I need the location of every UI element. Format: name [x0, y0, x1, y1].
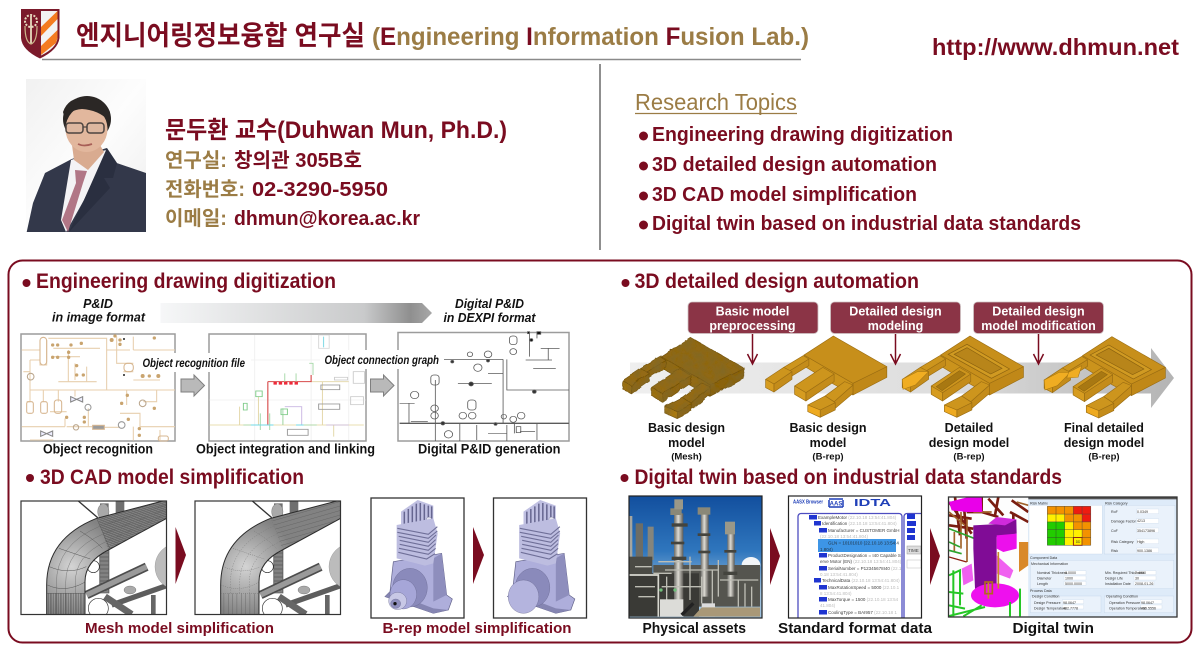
label: object recognition file	[137, 353, 251, 372]
image: physical plant assets	[629, 496, 762, 618]
step box: basic model preprocessing: Basic model	[716, 304, 789, 318]
caption: mesh model simplification: Mesh model simplification	[85, 620, 274, 637]
professor contact details: 전화번호:	[165, 178, 245, 201]
arrow: assets to data	[770, 528, 780, 585]
image: digital twin dashboard	[948, 497, 1177, 617]
professor contact details: dhmun@korea.ac.kr	[234, 208, 420, 230]
caption: detailed design model (B-rep)	[929, 421, 1009, 462]
image: AAS browser standard format data: 8 13:54:41.804)	[820, 591, 852, 596]
output label: digital P&ID in DEXPI format: Digital P&ID	[455, 297, 524, 311]
dashboard field labels: CoF	[1111, 529, 1119, 533]
caption: detailed design model (B-rep): (B-rep)	[953, 452, 985, 462]
image: AAS browser standard format data: MaxTorque = 1500 (22.10.18 13:54	[828, 597, 899, 602]
arrow: gradient flow	[160, 303, 432, 323]
drawing: raster P&ID object recognition	[21, 334, 175, 441]
dashboard field labels: 900.1386	[1137, 549, 1152, 553]
heading: 3D detailed design automation: 3D detailed design automation	[634, 270, 919, 293]
image: dense mesh pipes	[46, 502, 166, 614]
step box: detailed design model modification: model modification	[981, 319, 1096, 333]
header logo: university shield	[21, 9, 60, 58]
image frame: dense mesh	[21, 501, 166, 614]
heading: 3D CAD model simplification: 3D CAD model simplification	[40, 466, 304, 489]
step box: basic model preprocessing	[688, 302, 818, 334]
image: AAS browser standard format data: IDTA	[854, 497, 892, 509]
arrow: step 1 down	[748, 334, 758, 364]
caption: basic design model (B-rep): (B-rep)	[812, 452, 844, 462]
step box: basic model preprocessing: preprocessing	[709, 319, 796, 333]
dashboard field labels: 7.4800	[1135, 571, 1146, 575]
dashboard field labels	[1030, 502, 1156, 610]
risk matrix: DD	[1076, 540, 1081, 544]
caption: detailed design model (B-rep): design model	[929, 436, 1009, 450]
caption: digital P&ID generation: Digital P&ID generation	[418, 442, 560, 456]
image: AAS browser standard format data: SerialNumber = P12345678I40 (22.1	[828, 566, 902, 571]
dashboard field labels: Design Temperature	[1034, 606, 1066, 610]
3D model: detailed B-rep	[902, 336, 1023, 417]
dashboard field labels: 0.0349	[1137, 510, 1148, 514]
caption: final detailed design model (B-rep): (B-rep)	[1088, 452, 1120, 462]
caption: basic design model (B-rep): model	[810, 436, 846, 450]
caption: basic design model (mesh): Basic design	[648, 421, 725, 435]
title: (Engineering Information Fusion Lab.)	[372, 23, 809, 51]
drawing: digital P&ID	[398, 332, 569, 441]
dashboard field labels: Design Condition	[1032, 594, 1059, 598]
dashboard field labels: 2008-01-26	[1135, 582, 1153, 586]
dashboard field labels: Risk Category	[1105, 502, 1128, 506]
step box: detailed design model modification	[974, 302, 1104, 334]
dashboard field labels: Risk	[1111, 549, 1118, 553]
arrow: data to twin	[930, 528, 940, 585]
caption: basic design model (B-rep)	[789, 421, 867, 462]
dashboard field labels: Operating Condition	[1106, 594, 1138, 598]
dashboard field labels: Diameter	[1037, 576, 1052, 580]
research topics list: Digital twin based on industrial data standards	[652, 212, 1081, 235]
professor contact details: 02-3290-5950	[252, 179, 388, 201]
image: AAS browser standard format data: 41.804)	[820, 603, 836, 608]
step box: detailed design modeling	[830, 302, 960, 334]
dashboard field labels: Damage Factor	[1111, 520, 1137, 524]
image: AAS browser standard format data: ExampleMotor (22.10.18 13:54:41.804)	[818, 515, 897, 520]
dashboard field labels: Mechanical Information	[1031, 562, 1068, 566]
3D model: mesh	[623, 337, 744, 419]
dashboard field labels: Min. Required Thickness	[1105, 571, 1145, 575]
caption: final detailed design model (B-rep): design model	[1064, 436, 1144, 450]
input label: P&ID in image format: P&ID	[83, 297, 113, 311]
caption: B-rep model simplification: B-rep model simplification	[382, 620, 572, 637]
image: AAS browser standard format data: CoolingType = BAI957 (22.10.18 1	[828, 610, 897, 615]
drawing: integrated P&ID	[209, 334, 366, 441]
professor contact details: 창의관 305B호	[234, 149, 362, 172]
image: AAS browser standard format data: TIME	[908, 548, 919, 553]
dashboard field labels: Design Life	[1105, 576, 1123, 580]
output label: digital P&ID in DEXPI format: in DEXPI format	[444, 311, 536, 325]
arrow: background process band	[630, 348, 1174, 408]
professor contact details: 문두환 교수(Duhwan Mun, Ph.D.)	[165, 117, 507, 144]
dashboard field labels: Risk Matrix	[1030, 502, 1048, 506]
caption: final detailed design model (B-rep): Final detailed	[1064, 421, 1144, 435]
label: object recognition file: Object recognition file	[142, 358, 246, 370]
caption: basic design model (B-rep): Basic design	[789, 421, 867, 435]
dashboard field labels: Component Data	[1030, 556, 1057, 560]
research topics list: Research Topics	[635, 89, 797, 115]
image: simplified mesh pipes	[220, 502, 340, 614]
image: AAS browser standard format data: AAS	[830, 502, 842, 508]
dashboard field labels: Length	[1037, 582, 1048, 586]
3D model: basic B-rep	[766, 336, 887, 417]
panel: digital twin based on industrial data standards	[620, 466, 1177, 637]
step box: detailed design model modification: Detailed design	[992, 304, 1085, 318]
caption: basic design model (mesh): model	[668, 436, 705, 450]
arrow: grey process arrow 1	[181, 375, 204, 396]
caption: object recognition: Object recognition	[43, 442, 153, 456]
research topics list: 3D CAD model simplification	[652, 183, 917, 206]
website url: http://www.dhmun.net	[932, 34, 1179, 60]
dashboard field labels: 4213	[1137, 519, 1145, 523]
step box: detailed design modeling: modeling	[868, 319, 923, 333]
heading: digital twin based on industrial data standards: Digital twin based on industrial data standards	[634, 466, 1062, 489]
image: AAS browser standard format data: MaxRotationSpeed = 5000 (22.10.1	[828, 585, 900, 590]
caption: digital twin: Digital twin	[1012, 620, 1094, 637]
caption: basic design model (mesh)	[648, 421, 725, 462]
dashboard field labels: 354173896	[1137, 529, 1155, 533]
image: AAS browser standard format data: TechnicalData (22.10.18 13:54:41.804)	[822, 578, 900, 583]
research topics list	[635, 89, 1081, 235]
output label: digital P&ID in DEXPI format	[444, 297, 536, 325]
dashboard field labels: 1000	[1065, 576, 1073, 580]
image: simplified engine B-rep	[494, 498, 586, 618]
dashboard field labels: 98.0647	[1141, 601, 1154, 605]
heading: engineering drawing digitization: Engineering drawing digitization	[36, 270, 336, 293]
image frame: simplified mesh	[195, 501, 340, 614]
input label: P&ID in image format: in image format	[52, 310, 146, 324]
image: AAS browser standard format data: Identification (22.10.18 13:54:41.804)	[822, 521, 897, 526]
dashboard field labels: RoF	[1111, 510, 1119, 514]
dashboard field labels: 8.0000	[1065, 571, 1076, 575]
professor contact details	[165, 117, 507, 230]
caption: standard format data: Standard format data	[778, 620, 933, 637]
arrow: simplification 2	[473, 527, 484, 584]
dashboard field labels: 30	[1135, 576, 1139, 580]
dashboard field labels: Operation Pressure	[1109, 601, 1140, 605]
research topics list: Engineering drawing digitization	[652, 123, 953, 146]
input label: P&ID in image format	[52, 297, 146, 324]
image: AAS browser standard format data: GLN = 10101010 (22.10.18 13:54:4	[828, 540, 899, 546]
image: AAS browser standard format data: 1.804)	[820, 547, 833, 552]
caption: object integration and linking: Object integration and linking	[196, 442, 375, 456]
arrow: step 2 down	[890, 334, 900, 364]
dashboard field labels: Risk Category	[1111, 540, 1134, 544]
professor portrait photo	[26, 79, 146, 232]
panel: 3D detailed design automation	[622, 270, 1174, 462]
title	[76, 21, 809, 51]
dashboard field labels: 482.7778	[1063, 606, 1078, 610]
title: 엔지니어링정보융합 연구실	[76, 21, 365, 51]
dashboard field labels: 5000.0000	[1065, 582, 1082, 586]
dashboard field labels: 98.0647	[1063, 601, 1076, 605]
dashboard field labels: Operation Temperature	[1109, 606, 1146, 610]
image: AAS browser standard format data: erve Motor (EN) (22.10.18 13:54:41.804)	[820, 559, 902, 564]
arrow: simplification 1	[176, 527, 186, 584]
caption: basic design model (mesh): (Mesh)	[671, 452, 702, 462]
label: object connection graph: Object connection graph	[324, 355, 439, 367]
main rounded panel	[8, 260, 1192, 642]
panel: 3D CAD model simplification	[21, 466, 586, 637]
dashboard field labels: Nominal Thickness	[1037, 571, 1067, 575]
caption: physical assets: Physical assets	[642, 620, 746, 637]
image: AAS browser standard format data	[788, 496, 928, 624]
image: AAS browser standard format data: ProductDesignation = I40 Capable S	[828, 553, 901, 558]
dashboard field labels: 465.5556	[1141, 606, 1156, 610]
dashboard field labels: Design Pressure	[1034, 601, 1061, 605]
caption: final detailed design model (B-rep)	[1064, 421, 1144, 462]
step box: detailed design modeling: Detailed design	[849, 304, 942, 318]
dashboard field labels: High	[1137, 540, 1144, 544]
professor contact details: 이메일:	[165, 207, 227, 230]
arrow: step 3 down	[1034, 334, 1044, 364]
3D model: final B-rep	[1044, 337, 1165, 418]
panel: engineering drawing digitization	[21, 270, 569, 456]
risk matrix	[1047, 506, 1091, 545]
professor contact details: 연구실:	[165, 149, 227, 172]
research topics list: 3D detailed design automation	[652, 153, 937, 176]
dashboard field labels: Process Data	[1030, 589, 1052, 593]
image: AAS browser standard format data: 0.18 13:54:41.804)	[820, 572, 858, 577]
image: AAS browser standard format data: AASX Browser	[793, 500, 824, 506]
image: detailed engine B-rep	[371, 498, 464, 618]
caption: detailed design model (B-rep): Detailed	[945, 421, 993, 435]
image: AAS browser standard format data: (22.10.18 13:54:41.804)	[820, 534, 869, 539]
arrow: grey process arrow 2	[370, 375, 394, 396]
image frame: physical assets	[629, 496, 762, 618]
dashboard field labels: Installation Date	[1105, 582, 1131, 586]
label: object connection graph	[320, 350, 444, 369]
image: AAS browser standard format data: Manufacturer = CUSTOMER GmbH	[828, 528, 900, 533]
